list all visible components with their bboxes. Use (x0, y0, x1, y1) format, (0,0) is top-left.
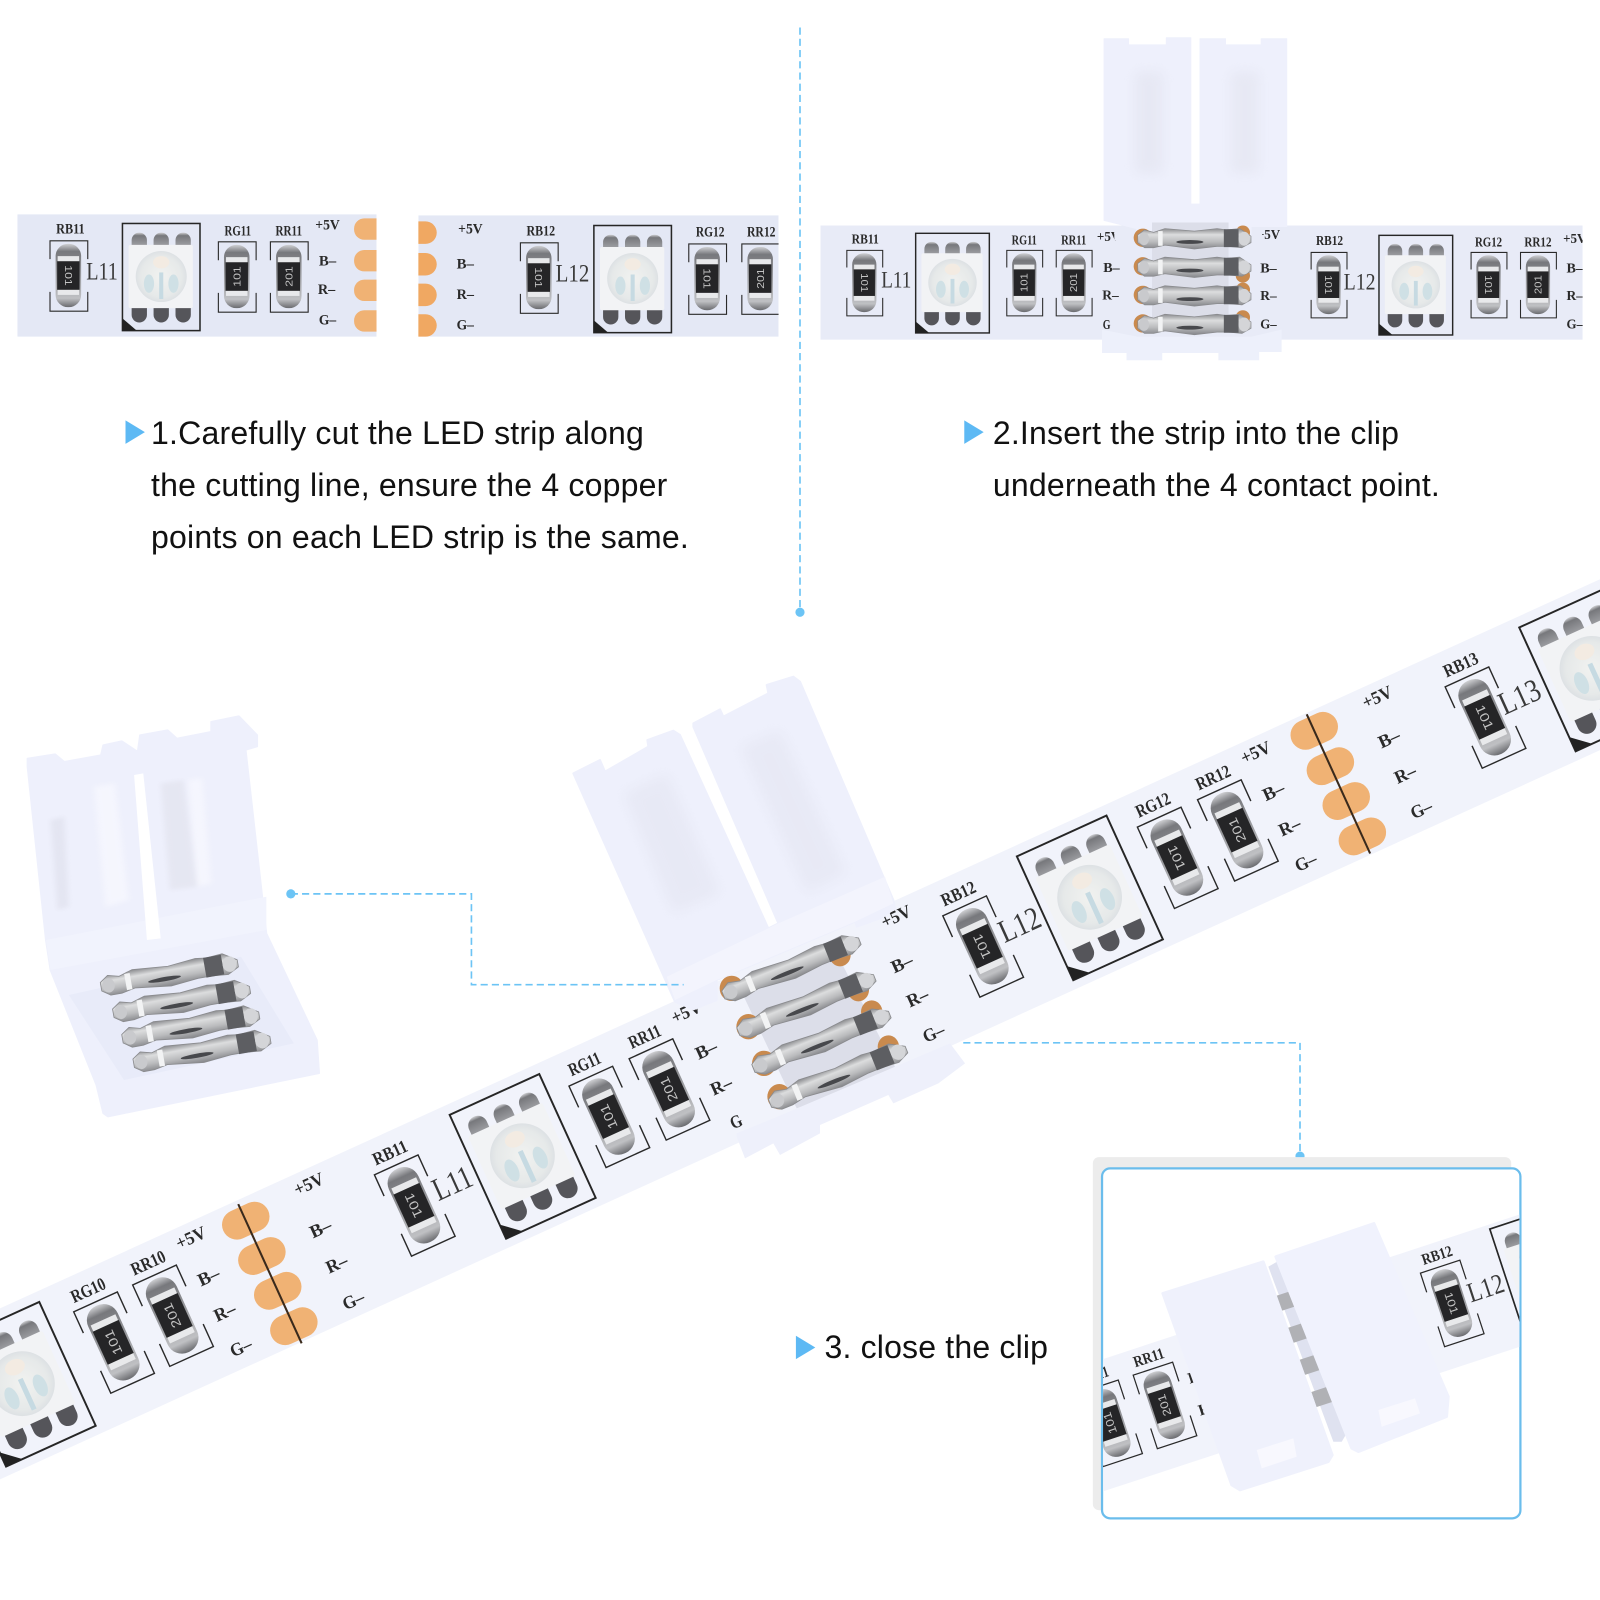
right segment: R– (1260, 288, 1277, 303)
photo: loose open clip (28, 716, 319, 1117)
photo: cut LED strip, right piece (398, 215, 780, 337)
segment L12: R– (903, 984, 932, 1011)
photo: cut LED strip, left piece (17, 214, 395, 337)
segment RG10 RR10: B– (194, 1262, 224, 1290)
right segment: RB12 (1316, 233, 1343, 248)
segment L11: R– (707, 1072, 736, 1099)
strip right part: 101 (1441, 1291, 1460, 1316)
right segment: 101 (1322, 275, 1333, 294)
label RR11: RR11 (276, 224, 302, 240)
inset photo (1103, 1214, 1520, 1492)
left segment: RB11 (852, 232, 879, 247)
segment RG10 RR10: RG10 (67, 1274, 109, 1307)
segment L13: G– (1407, 795, 1436, 823)
segment RG10 RR10: RR10 (128, 1246, 169, 1279)
left segment: 101 (858, 273, 869, 292)
left segment (847, 229, 1121, 333)
resistor RG11: 101 (232, 266, 243, 287)
left segment: L11 (881, 268, 911, 293)
metal contacts (99, 951, 272, 1075)
resistor RR11 (270, 242, 308, 312)
segment L12: 101 (1165, 843, 1189, 872)
left segment: RG11 (1012, 233, 1037, 248)
closed clip (1163, 1223, 1448, 1490)
label RG11: RG11 (224, 224, 251, 240)
right segment: B– (1260, 260, 1277, 275)
contact plate (738, 953, 898, 1108)
strip right part: RB12 (1420, 1243, 1455, 1269)
right segment: +5V (1257, 227, 1280, 242)
segment L13: R– (1391, 760, 1420, 788)
step 1 instruction: 1.Carefully cut the LED strip along (151, 415, 644, 451)
flat strip (820, 226, 1587, 340)
segment L11: RR11 (625, 1020, 664, 1053)
clip arms (573, 677, 895, 1009)
right segment (1257, 227, 1587, 335)
right segment: L12 (1344, 270, 1376, 295)
vertical divider (795, 28, 805, 617)
polarity labels (457, 222, 483, 334)
right segment: R– (1567, 288, 1583, 303)
resistor RR11: 201 (284, 266, 295, 287)
segment RG10 RR10: 201 (160, 1300, 184, 1330)
open clip arms (1104, 38, 1287, 241)
resistor RB12 (520, 243, 558, 313)
leader: loose clip to strip (286, 889, 684, 985)
segment L13: RB13 (1440, 648, 1481, 681)
step 1 instruction (126, 415, 689, 555)
strip-coloured mask over hidden label parts (1114, 227, 1262, 241)
panel frame (1102, 1168, 1520, 1518)
leader: clip to closed view (963, 1043, 1305, 1161)
segment L11: +5V (668, 996, 704, 1027)
segment L12: B– (888, 949, 917, 977)
resistor RR12 (742, 244, 780, 314)
polarity labels: G– (319, 312, 337, 328)
resistor RG11 (218, 242, 256, 312)
seat (69, 957, 294, 1080)
step 2 instruction: 2.Insert the strip into the clip (993, 415, 1399, 451)
segment L12: G– (1292, 848, 1321, 876)
resistor RB11 (50, 241, 88, 311)
polarity labels: B– (319, 253, 337, 269)
arm shading (51, 778, 211, 910)
segment L11: RB11 (369, 1136, 411, 1169)
panel shadow (1093, 1157, 1511, 1510)
right segment: RR12 (1524, 235, 1552, 250)
segment L11: 101 (596, 1102, 621, 1131)
polarity labels: B– (457, 256, 475, 272)
copper pads (418, 221, 437, 337)
resistor RB12: 101 (532, 267, 543, 288)
hinge band (46, 897, 266, 970)
left segment: B– (1103, 260, 1120, 275)
exposed contacts (1276, 1292, 1332, 1407)
clip right half (1276, 1223, 1448, 1452)
label L12: L12 (556, 259, 589, 288)
photo: open clip on diagonal strip (573, 677, 965, 1158)
label RR12: RR12 (747, 225, 776, 241)
segment L11: 201 (656, 1074, 681, 1104)
LED chip (122, 223, 200, 331)
label L11: L11 (86, 257, 118, 286)
left segment: G (1103, 317, 1111, 332)
segment L13: 101 (1472, 702, 1497, 732)
segment L11: RG11 (565, 1048, 604, 1080)
segment L12: 201 (1225, 815, 1249, 845)
right segment: +5V (1563, 231, 1587, 246)
step 2 instruction: underneath the 4 contact point. (993, 467, 1440, 503)
clip lower edge (1102, 330, 1282, 360)
clip lower edge (737, 1043, 965, 1158)
segment L13 (1357, 582, 1600, 824)
resistor RR12: 201 (756, 268, 767, 289)
resistor RB11: 101 (62, 265, 73, 286)
polarity labels: G– (457, 318, 475, 334)
step 3 instruction: 3. close the clip (824, 1329, 1048, 1365)
strip left part: 201 (1156, 1392, 1174, 1417)
polarity labels: +5V (458, 222, 483, 238)
copper pads with cut line (216, 1194, 324, 1353)
resistor RG12 (689, 244, 727, 314)
panel: closed clip inset (1093, 1157, 1522, 1520)
bullet arrow (964, 420, 984, 444)
left segment: +5V (1097, 229, 1121, 244)
polarity labels: R– (457, 287, 475, 303)
copper pads (354, 218, 376, 332)
segment L12: B– (1259, 777, 1288, 805)
clip base and contact plate (1152, 222, 1229, 331)
segment L11: +5V (290, 1168, 327, 1199)
strip left part (1103, 1335, 1218, 1492)
segment L11: 101 (402, 1190, 426, 1220)
right segment: G– (1260, 316, 1277, 331)
left segment: 101 (1020, 273, 1031, 292)
segment L12: +5V (1237, 737, 1274, 768)
slit (134, 773, 161, 940)
segment L11: B– (692, 1036, 721, 1063)
strip right part (1390, 1214, 1520, 1373)
tabs (1257, 1438, 1297, 1468)
polarity labels (315, 218, 340, 328)
clip left half (1163, 1262, 1332, 1490)
step 1 instruction: the cutting line, ensure the 4 copper (151, 467, 668, 503)
clip centre channel (1268, 1260, 1347, 1442)
strip left part: B– (1186, 1365, 1209, 1388)
strip left part: RG11 (1078, 1363, 1111, 1389)
segment L12: RB12 (938, 877, 979, 910)
segment L12: G– (919, 1019, 949, 1047)
segment L11: G– (339, 1286, 368, 1314)
resistor RG12: 101 (701, 268, 712, 289)
segment RG10 RR10: G– (227, 1333, 256, 1361)
strip left part: R– (1196, 1397, 1220, 1420)
polarity labels: +5V (315, 218, 340, 234)
strip right part: L12 (1463, 1268, 1508, 1309)
segment L11: G (727, 1110, 746, 1133)
right segment: 101 (1482, 275, 1493, 294)
segment L12: RR12 (1192, 761, 1234, 794)
segment L13: B– (1375, 725, 1404, 752)
label RG12: RG12 (696, 225, 724, 241)
left segment: R– (1102, 288, 1119, 303)
step 2 instruction (964, 415, 1440, 503)
photo: strip inserted in open clip (step 2) (820, 38, 1587, 360)
segment L12: 101 (970, 931, 994, 961)
segment L12: R– (1275, 813, 1305, 840)
metal contacts (1134, 226, 1251, 335)
label RB11: RB11 (56, 222, 85, 238)
right segment: G– (1567, 316, 1583, 331)
segment RG10 RR10 (0, 1222, 260, 1467)
segment L11: L11 (427, 1159, 478, 1208)
segment L12: L12 (993, 900, 1047, 951)
left segment: 201 (1069, 273, 1080, 292)
bullet arrow (796, 1336, 815, 1359)
polarity labels: R– (318, 282, 336, 298)
right segment: RG12 (1475, 235, 1502, 250)
arm shading (623, 730, 847, 913)
strip left part: 101 (1102, 1410, 1120, 1435)
segment RG10 RR10: +5V (173, 1222, 209, 1253)
strip left part: RR11 (1131, 1345, 1167, 1371)
segment RG10 RR10: 101 (101, 1327, 125, 1357)
label RB12: RB12 (527, 224, 555, 240)
right segment: 201 (1533, 275, 1544, 294)
left segment: RR11 (1061, 233, 1087, 248)
segment L13: +5V (1359, 681, 1395, 713)
hinge band (667, 877, 893, 1000)
segment L12: +5V (878, 901, 914, 932)
segment L11 (288, 996, 756, 1314)
bullet arrow (126, 420, 145, 444)
segment L11: B– (306, 1214, 336, 1242)
segment RG10 RR10: R– (211, 1298, 240, 1326)
metal contacts (719, 930, 910, 1114)
step 1 instruction: points on each LED strip is the same. (151, 519, 689, 555)
segment L12: RG12 (1132, 788, 1174, 822)
segment L13: L13 (1493, 672, 1547, 723)
clip body (28, 716, 319, 1117)
segment L12 (869, 737, 1325, 1047)
right segment: B– (1567, 260, 1583, 275)
photo: diagonal LED strip (0, 560, 1600, 1503)
copper pads with cut line (1284, 704, 1393, 864)
segment L11: R– (322, 1250, 352, 1277)
LED chip (594, 226, 671, 333)
